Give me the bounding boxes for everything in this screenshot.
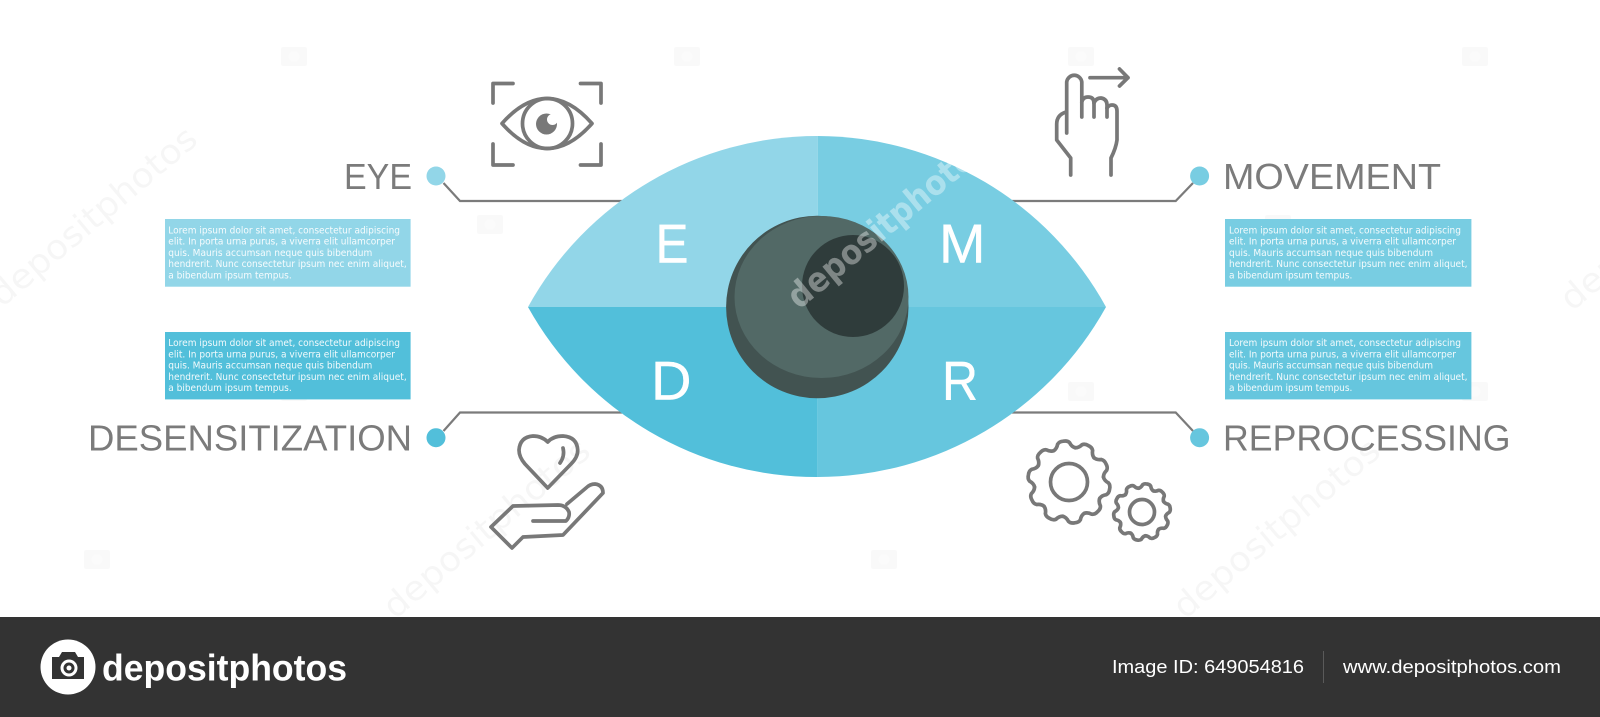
heading: desensitization: DESENSITIZATION bbox=[88, 418, 412, 458]
footer bar bbox=[0, 617, 1600, 717]
text block: eye: elit. In porta urna purus, a viverra elit ullamcorper bbox=[168, 237, 395, 248]
watermark on eye: depositphotos bbox=[779, 127, 998, 317]
text block: desensitization: a bibendum ipsum tempus. bbox=[168, 383, 292, 394]
text block: movement: quis. Mauris accumsan neque quis bibendum bbox=[1229, 248, 1433, 259]
connector: eye bbox=[426, 166, 622, 201]
pupil bbox=[726, 216, 908, 398]
text block: desensitization: quis. Mauris accumsan neque quis bibendum bbox=[168, 361, 372, 372]
connector: movement bbox=[1012, 166, 1209, 201]
background watermark: depositphotos bbox=[375, 430, 598, 627]
quadrant: E bbox=[528, 136, 818, 307]
heading: reprocessing: REPROCESSING bbox=[1223, 418, 1510, 458]
quadrant: D bbox=[528, 307, 818, 477]
text block: movement bbox=[1225, 219, 1471, 287]
text block: eye: Lorem ipsum dolor sit amet, consectetur adipiscing bbox=[168, 225, 400, 236]
icon: finger swipe bbox=[1057, 69, 1128, 175]
heading: eye: EYE bbox=[344, 156, 412, 197]
text block: reprocessing bbox=[1225, 332, 1471, 399]
image id: Image ID: 649054816 bbox=[1112, 656, 1304, 677]
text block: reprocessing: elit. In porta urna purus, a viverra elit ullamcorper bbox=[1229, 349, 1456, 360]
text block: movement: a bibendum ipsum tempus. bbox=[1229, 270, 1352, 282]
letter M: M bbox=[939, 212, 986, 274]
connector: desensitization bbox=[426, 412, 622, 447]
text block: eye: quis. Mauris accumsan neque quis bibendum bbox=[168, 248, 372, 259]
divider bbox=[1322, 651, 1324, 683]
connector: reprocessing bbox=[1012, 412, 1209, 447]
background watermark: depositphotos bbox=[1165, 430, 1388, 627]
text block: desensitization: Lorem ipsum dolor sit amet, consectetur adipiscing bbox=[168, 338, 400, 349]
icon: eye in focus frame bbox=[493, 84, 601, 165]
text block: desensitization: hendrerit. Nunc consectetur ipsum nec enim aliquet, bbox=[168, 372, 407, 383]
text block: reprocessing: quis. Mauris accumsan neque quis bibendum bbox=[1229, 361, 1433, 372]
icon: gears bbox=[1021, 435, 1176, 545]
text block: movement: elit. In porta urna purus, a viverra elit ullamcorper bbox=[1229, 237, 1456, 248]
heading: movement: MOVEMENT bbox=[1223, 156, 1441, 197]
site url: www.depositphotos.com bbox=[1342, 656, 1561, 677]
letter R: R bbox=[942, 350, 978, 412]
text block: eye bbox=[165, 219, 411, 287]
logo: camera badge bbox=[40, 640, 96, 694]
quadrant: R bbox=[818, 307, 1106, 477]
text block: eye: a bibendum ipsum tempus. bbox=[168, 270, 292, 282]
quadrant: M bbox=[818, 136, 1106, 307]
text block: reprocessing: a bibendum ipsum tempus. bbox=[1229, 383, 1352, 394]
icon: heart over hand bbox=[491, 436, 603, 548]
central eye diagram bbox=[528, 127, 1106, 477]
letter D: D bbox=[651, 350, 692, 412]
text block: desensitization: elit. In porta urna purus, a viverra elit ullamcorper bbox=[168, 349, 395, 360]
text block: eye: hendrerit. Nunc consectetur ipsum nec enim aliquet, bbox=[168, 259, 407, 270]
text block: reprocessing: hendrerit. Nunc consectetur ipsum nec enim aliquet, bbox=[1229, 372, 1468, 383]
letter E: E bbox=[656, 212, 688, 274]
text block: movement: hendrerit. Nunc consectetur ipsum nec enim aliquet, bbox=[1229, 259, 1468, 270]
text block: reprocessing: Lorem ipsum dolor sit amet, consectetur adipiscing bbox=[1229, 338, 1461, 349]
text block: desensitization bbox=[165, 332, 411, 399]
text block: movement: Lorem ipsum dolor sit amet, consectetur adipiscing bbox=[1229, 225, 1461, 236]
logo: wordmark: depositphotos bbox=[102, 648, 347, 688]
